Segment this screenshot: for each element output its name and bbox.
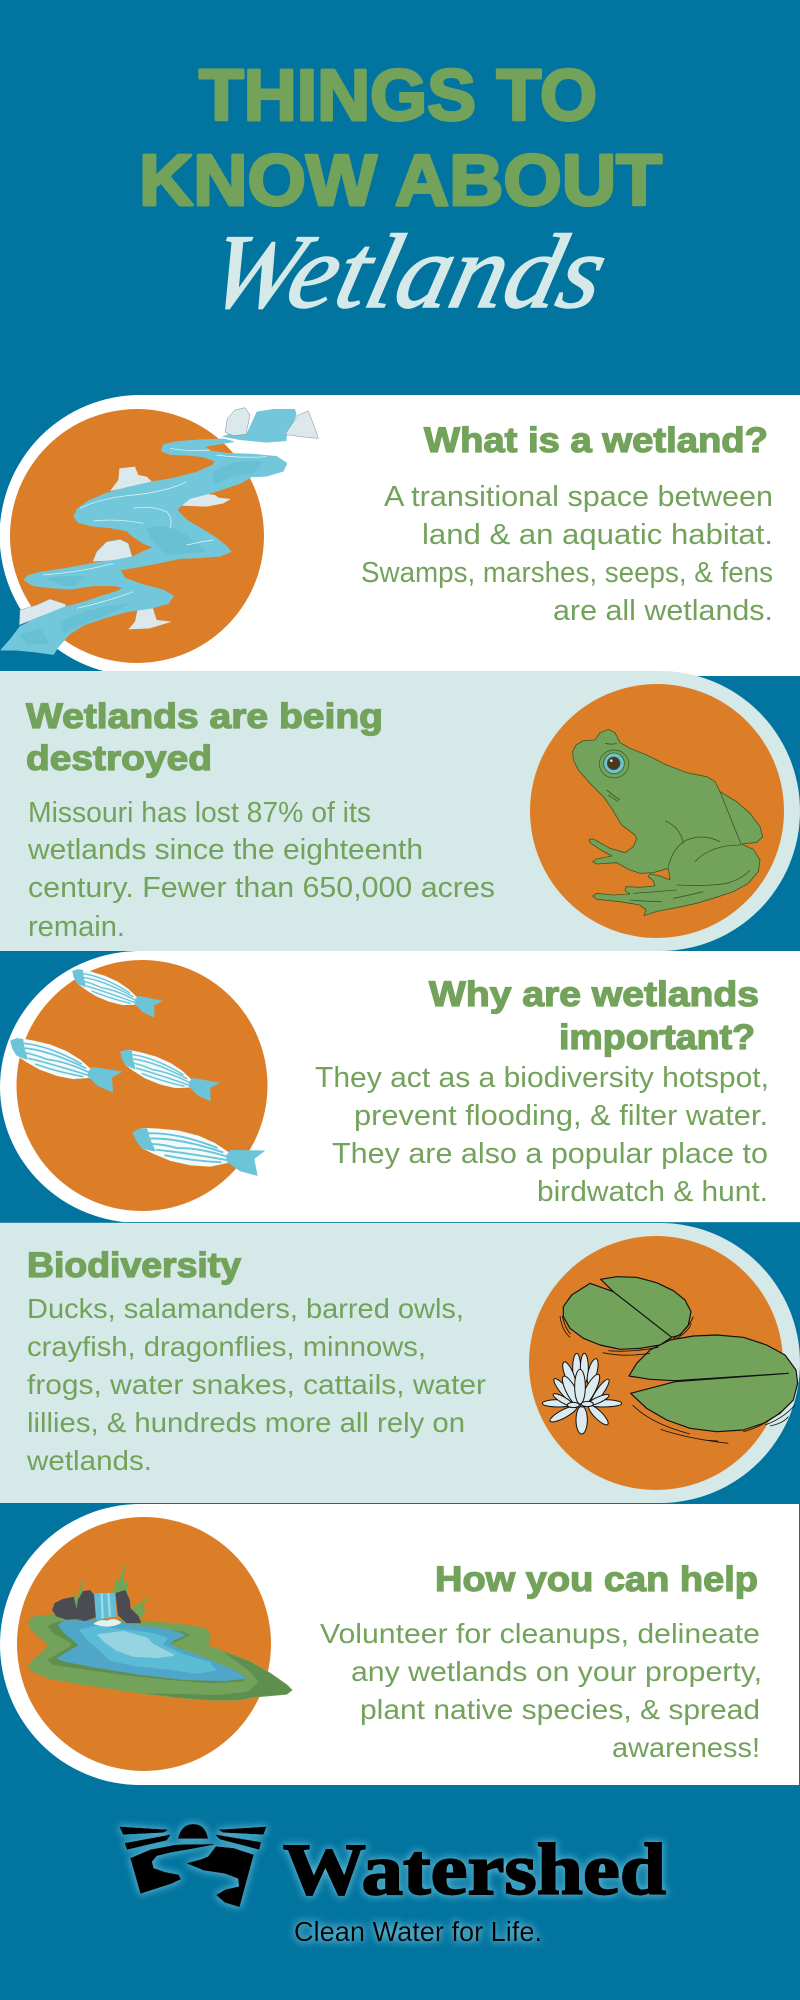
icon: watershed mark — [120, 1824, 266, 1907]
title: THINGS TO — [199, 56, 597, 136]
icon: pond with waterfall — [28, 1562, 292, 1700]
tagline: Clean Water for Life. — [294, 1916, 542, 1947]
body text: wetlands. — [26, 1445, 152, 1476]
body text: birdwatch & hunt. — [537, 1176, 768, 1208]
body text: awareness! — [612, 1732, 760, 1763]
body text: Volunteer for cleanups, delineate — [320, 1618, 760, 1649]
body text: wetlands since the eighteenth — [27, 834, 423, 866]
heading: How you can help — [435, 1560, 758, 1599]
wordmark: Watershed — [283, 1829, 666, 1910]
body text — [320, 1618, 762, 1763]
orange circle — [529, 1236, 783, 1490]
heading — [26, 697, 383, 778]
body text — [27, 797, 495, 943]
body text: Swamps, marshes, seeps, & fens — [361, 557, 773, 589]
title: KNOW ABOUT — [139, 141, 662, 221]
panel: how you can help — [0, 1504, 799, 1785]
panel: wetlands are being destroyed — [0, 671, 800, 951]
body text: Ducks, salamanders, barred owls, — [27, 1293, 464, 1324]
orange circle — [10, 409, 264, 663]
body text — [26, 1293, 486, 1476]
icon: river — [1, 408, 318, 654]
body text: any wetlands on your property, — [351, 1656, 762, 1687]
body text: A transitional space between — [384, 481, 773, 513]
body text: frogs, water snakes, cattails, water — [27, 1369, 486, 1400]
panel: what is a wetland — [0, 395, 800, 676]
body text: remain. — [28, 911, 125, 943]
body text: They are also a popular place to — [332, 1138, 768, 1170]
heading: Why are wetlands — [429, 975, 759, 1014]
title: Wetlands — [197, 213, 618, 331]
orange circle — [17, 1517, 271, 1771]
icon: fish school — [11, 969, 267, 1191]
orange circle — [530, 684, 784, 938]
body text: Missouri has lost 87% of its — [28, 797, 371, 829]
body text: prevent flooding, & filter water. — [354, 1100, 768, 1132]
body text: are all wetlands. — [553, 595, 773, 627]
body text: crayfish, dragonflies, minnows, — [27, 1331, 426, 1362]
body text: plant native species, & spread — [360, 1694, 760, 1725]
body text — [315, 1062, 769, 1208]
icon: lily pads and flower — [542, 1277, 798, 1443]
heading: Wetlands are being — [26, 697, 383, 736]
heading: destroyed — [26, 739, 212, 778]
body text: land & an aquatic habitat. — [422, 519, 773, 551]
body text — [361, 481, 773, 627]
body text: lillies, & hundreds more all rely on — [27, 1407, 465, 1438]
heading: What is a wetland? — [424, 421, 768, 460]
heading — [429, 975, 759, 1057]
icon: frog — [573, 729, 763, 916]
heading: important? — [559, 1018, 755, 1057]
panel: biodiversity — [0, 1223, 800, 1503]
orange circle — [16, 960, 268, 1211]
logo: Watershed — [120, 1824, 666, 1947]
body text: century. Fewer than 650,000 acres — [28, 872, 495, 904]
title — [139, 56, 662, 331]
panel: why are wetlands important — [0, 951, 800, 1223]
body text: They act as a biodiversity hotspot, — [315, 1062, 769, 1094]
heading: Biodiversity — [27, 1246, 242, 1285]
